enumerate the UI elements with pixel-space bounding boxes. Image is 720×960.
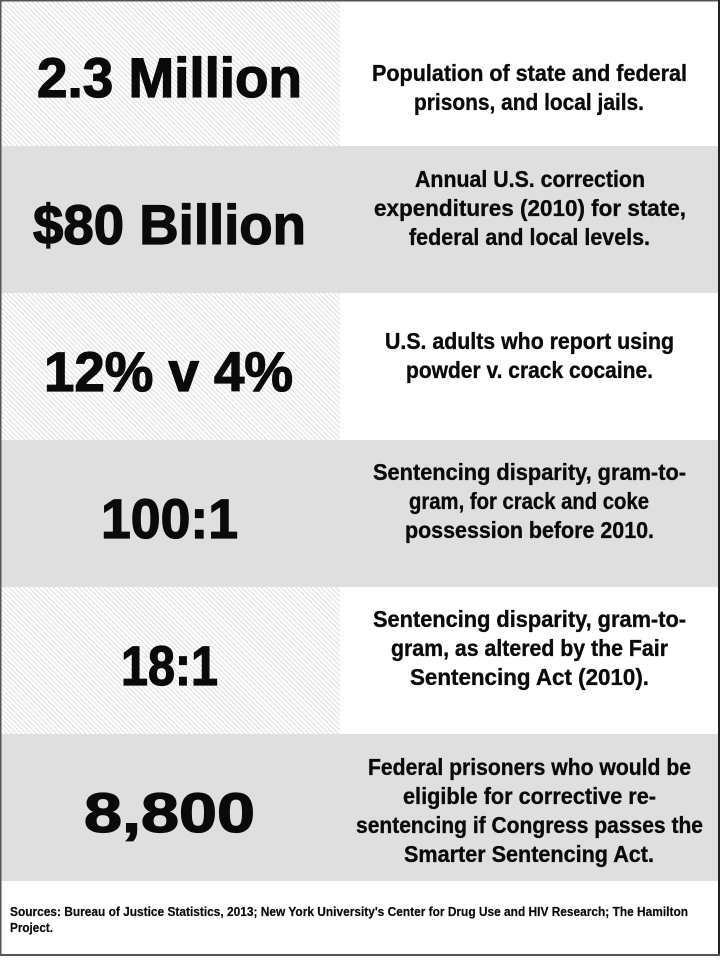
description: eligible federal prisoners: Federal prisoners who would be	[368, 754, 691, 780]
panel: $80 billion row	[0, 146, 720, 293]
description: eligible federal prisoners: eligible for corrective re-	[403, 783, 656, 809]
stat: 12% v 4%: 12% v 4%	[44, 340, 293, 403]
description: sentencing disparity before 2010: gram, for crack and coke	[409, 488, 649, 514]
panel: 100:1 row	[0, 440, 720, 587]
panel: 8,800 row	[0, 734, 720, 881]
description: Fair Sentencing Act disparity: Sentencing Act (2010).	[410, 664, 649, 690]
description: prison population: prisons, and local jails.	[414, 89, 644, 115]
description: Fair Sentencing Act disparity: Sentencing disparity, gram-to-	[373, 606, 686, 632]
stat: 8,800: 8,800	[84, 781, 255, 844]
description: correction expenditures: expenditures (2010) for state,	[374, 195, 686, 221]
description: sentencing disparity before 2010: possession before 2010.	[405, 517, 654, 543]
sources note	[10, 905, 688, 935]
sources note: Sources: Bureau of Justice Statistics, 2013; New York University's Center for Drug Use and HIV Research; The Hamilton	[10, 905, 688, 919]
description: correction expenditures: Annual U.S. correction	[415, 166, 645, 192]
stat: 100:1: 100:1	[101, 487, 238, 550]
sources note: Project.	[10, 921, 53, 935]
description: cocaine use: U.S. adults who report using	[385, 328, 674, 354]
description: prison population: Population of state and federal	[372, 60, 687, 86]
description: Fair Sentencing Act disparity: gram, as altered by the Fair	[391, 635, 668, 661]
description: sentencing disparity before 2010	[373, 459, 686, 543]
stat: 2.3 Million: 2.3 Million	[37, 46, 302, 109]
description: cocaine use: powder v. crack cocaine.	[406, 357, 653, 383]
description: correction expenditures: federal and local levels.	[409, 224, 650, 250]
stat: 18:1: 18:1	[121, 634, 218, 697]
description: Fair Sentencing Act disparity	[373, 606, 686, 690]
description: cocaine use	[385, 328, 674, 383]
stat: $80 Billion: $80 Billion	[33, 193, 306, 256]
description: eligible federal prisoners	[356, 754, 703, 867]
description: eligible federal prisoners: Smarter Sentencing Act.	[404, 841, 654, 867]
description: correction expenditures	[374, 166, 686, 250]
panel: 2.3 million row	[0, 0, 720, 146]
description: sentencing disparity before 2010: Sentencing disparity, gram-to-	[373, 459, 686, 485]
description: prison population	[372, 60, 687, 115]
panel: 12% v 4% row	[0, 293, 720, 440]
panel: 18:1 row	[0, 587, 720, 734]
